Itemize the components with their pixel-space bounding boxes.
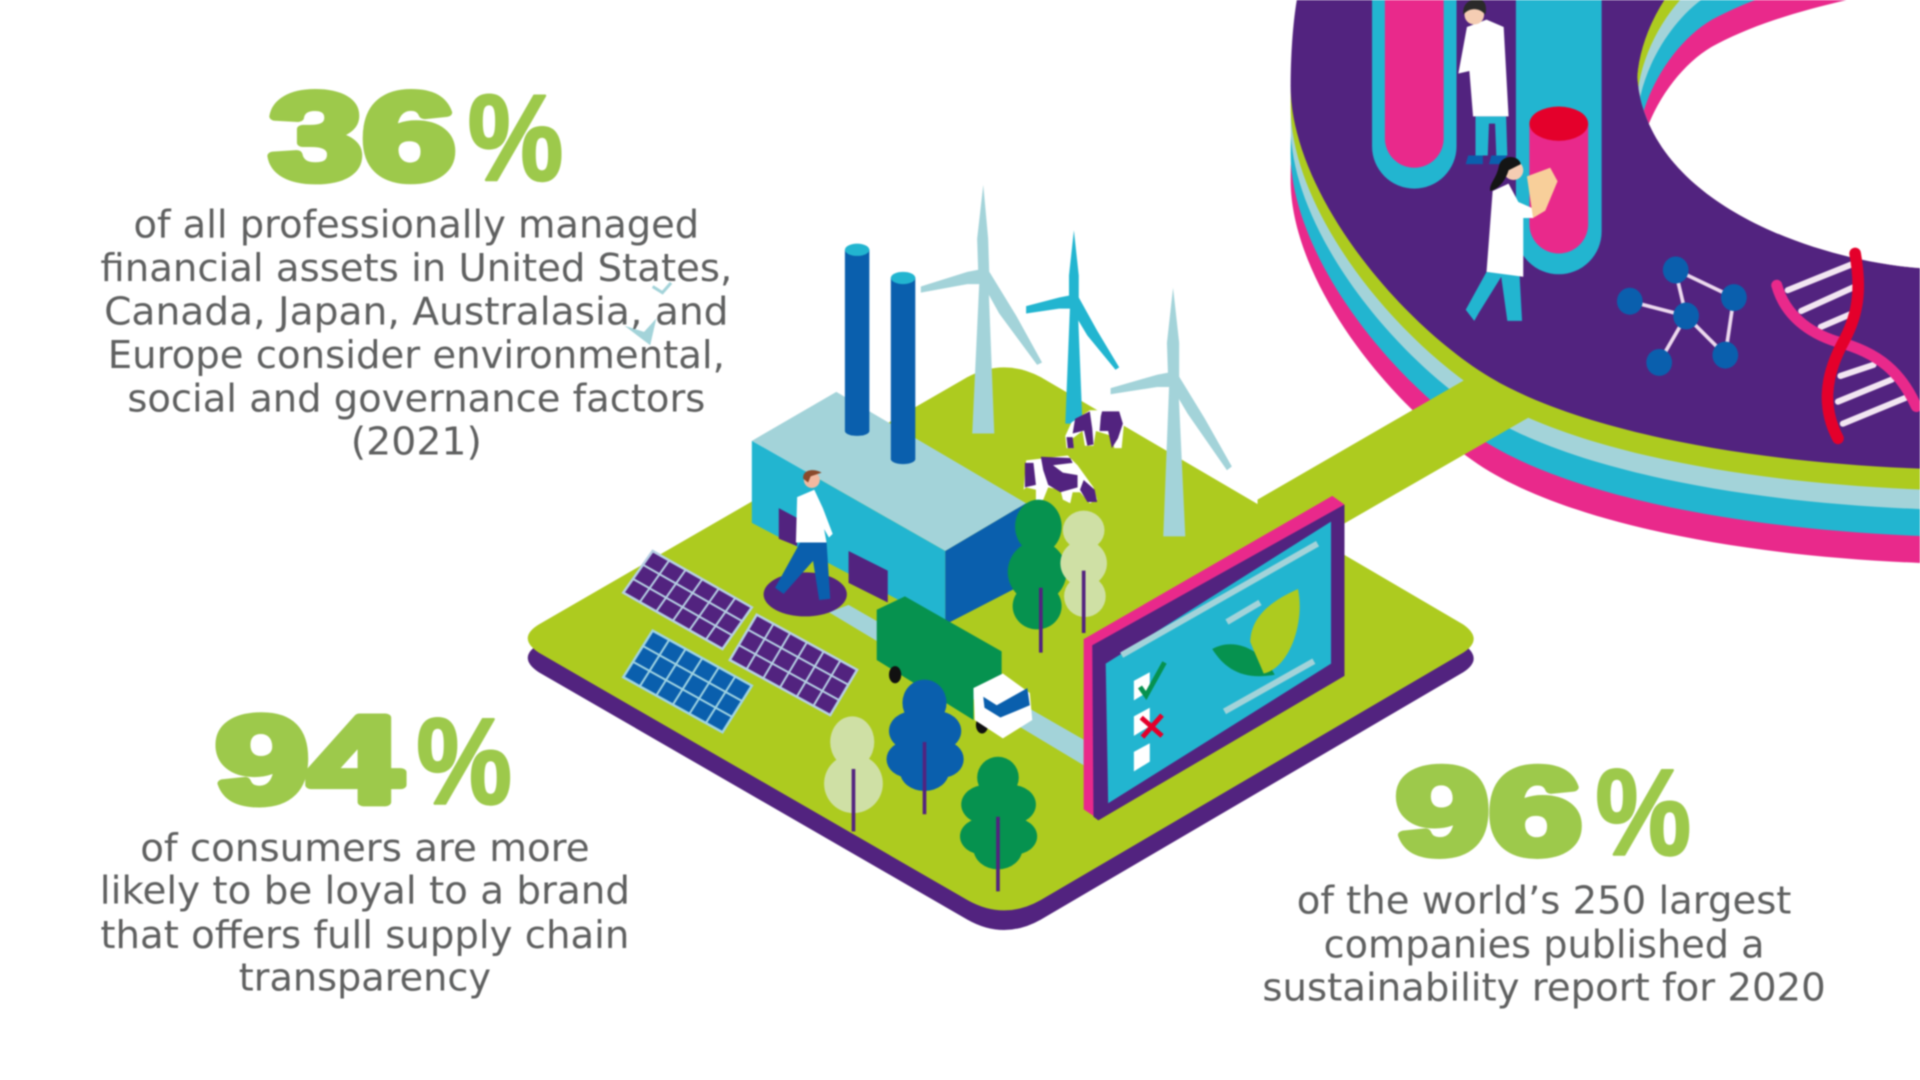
description 36%: Europe consider environmental, (108, 333, 725, 377)
number 96%: 96 (1396, 742, 1582, 879)
solar panel: right (730, 615, 857, 715)
description 96% (1262, 878, 1826, 1009)
molecule icon (1617, 257, 1747, 376)
description 36%: of all professionally managed (133, 203, 699, 247)
test tube: teal right (1516, 0, 1602, 274)
truck wheels (889, 666, 988, 733)
description 94%: transparency (239, 956, 491, 1000)
scientist with clipboard (1466, 157, 1558, 321)
road (829, 605, 1084, 765)
description 96%: companies published a (1324, 923, 1764, 967)
number 94% (216, 691, 512, 829)
tablet screen (1106, 522, 1331, 803)
description 36%: social and governance factors (127, 376, 705, 420)
factory (752, 244, 1026, 624)
factory doors (779, 508, 888, 602)
factory side wall (945, 503, 1026, 624)
number 36% (269, 68, 563, 206)
DNA helix icon (1777, 253, 1916, 438)
number 36%: % (468, 69, 563, 206)
sustainability tablet (1084, 496, 1344, 820)
solar panel: blue (623, 631, 752, 732)
chimney: short (891, 272, 915, 464)
description 36%: financial assets in United States, (100, 246, 732, 290)
bird: lower (624, 318, 656, 345)
platform side (528, 387, 1474, 930)
description 36%: Canada, Japan, Australasia, and (104, 289, 729, 333)
ring platform: research lab (1258, 0, 1920, 576)
description 96%: of the world’s 250 largest (1297, 878, 1791, 922)
delivery truck (877, 596, 1032, 738)
factory front wall (752, 441, 945, 624)
description 94%: likely to be loyal to a brand (100, 869, 630, 913)
tree: green by factory (1008, 500, 1067, 653)
description 36%: (2021) (351, 419, 482, 463)
description 94%: that offers full supply chain (100, 913, 629, 957)
ring side layers (1291, 15, 1920, 563)
checklist icon (1134, 662, 1164, 771)
stat: 96% (1262, 742, 1826, 1009)
stat: 36% (100, 68, 732, 463)
connector road (1258, 355, 1580, 576)
description 94% (100, 826, 630, 1000)
description 94%: of consumers are more (140, 826, 590, 870)
test tube: pink left (1372, 0, 1457, 189)
tablet purple frame (1092, 504, 1344, 820)
worker walking (764, 470, 847, 616)
cow: lower (1024, 456, 1097, 503)
number 36%: 36 (269, 68, 456, 205)
bird: upper (653, 283, 671, 293)
number 96%: % (1596, 744, 1691, 881)
chimney: tall (845, 244, 869, 436)
stat: 94% (100, 691, 630, 1000)
tree: green bottom (960, 757, 1037, 891)
truck cargo box (877, 596, 1002, 720)
wind turbine: right (1111, 288, 1232, 536)
ring hole with inner wall (1636, 0, 1920, 270)
wind turbine: left (921, 185, 1042, 433)
isometric platform (528, 367, 1474, 930)
leaf icon (1212, 589, 1300, 676)
factory roof (752, 392, 1026, 551)
truck cab (973, 673, 1032, 738)
number 96% (1396, 742, 1691, 881)
solar panel: upper left (623, 551, 752, 649)
number 94%: 94 (216, 691, 402, 828)
tree: pale by factory (1060, 511, 1107, 633)
tablet pink edge (1084, 496, 1344, 819)
platform top (528, 367, 1474, 910)
tree: blue (887, 680, 964, 814)
ring top surface (1291, 0, 1920, 469)
description 36% (100, 203, 732, 463)
tree: pale bottom left (824, 716, 883, 831)
screen text lines (1122, 544, 1318, 711)
description 96%: sustainability report for 2020 (1262, 965, 1826, 1009)
cow: upper (1065, 410, 1124, 448)
number 94%: % (416, 692, 512, 829)
wind turbine: middle (1026, 230, 1119, 424)
scientist standing (1458, 0, 1509, 164)
